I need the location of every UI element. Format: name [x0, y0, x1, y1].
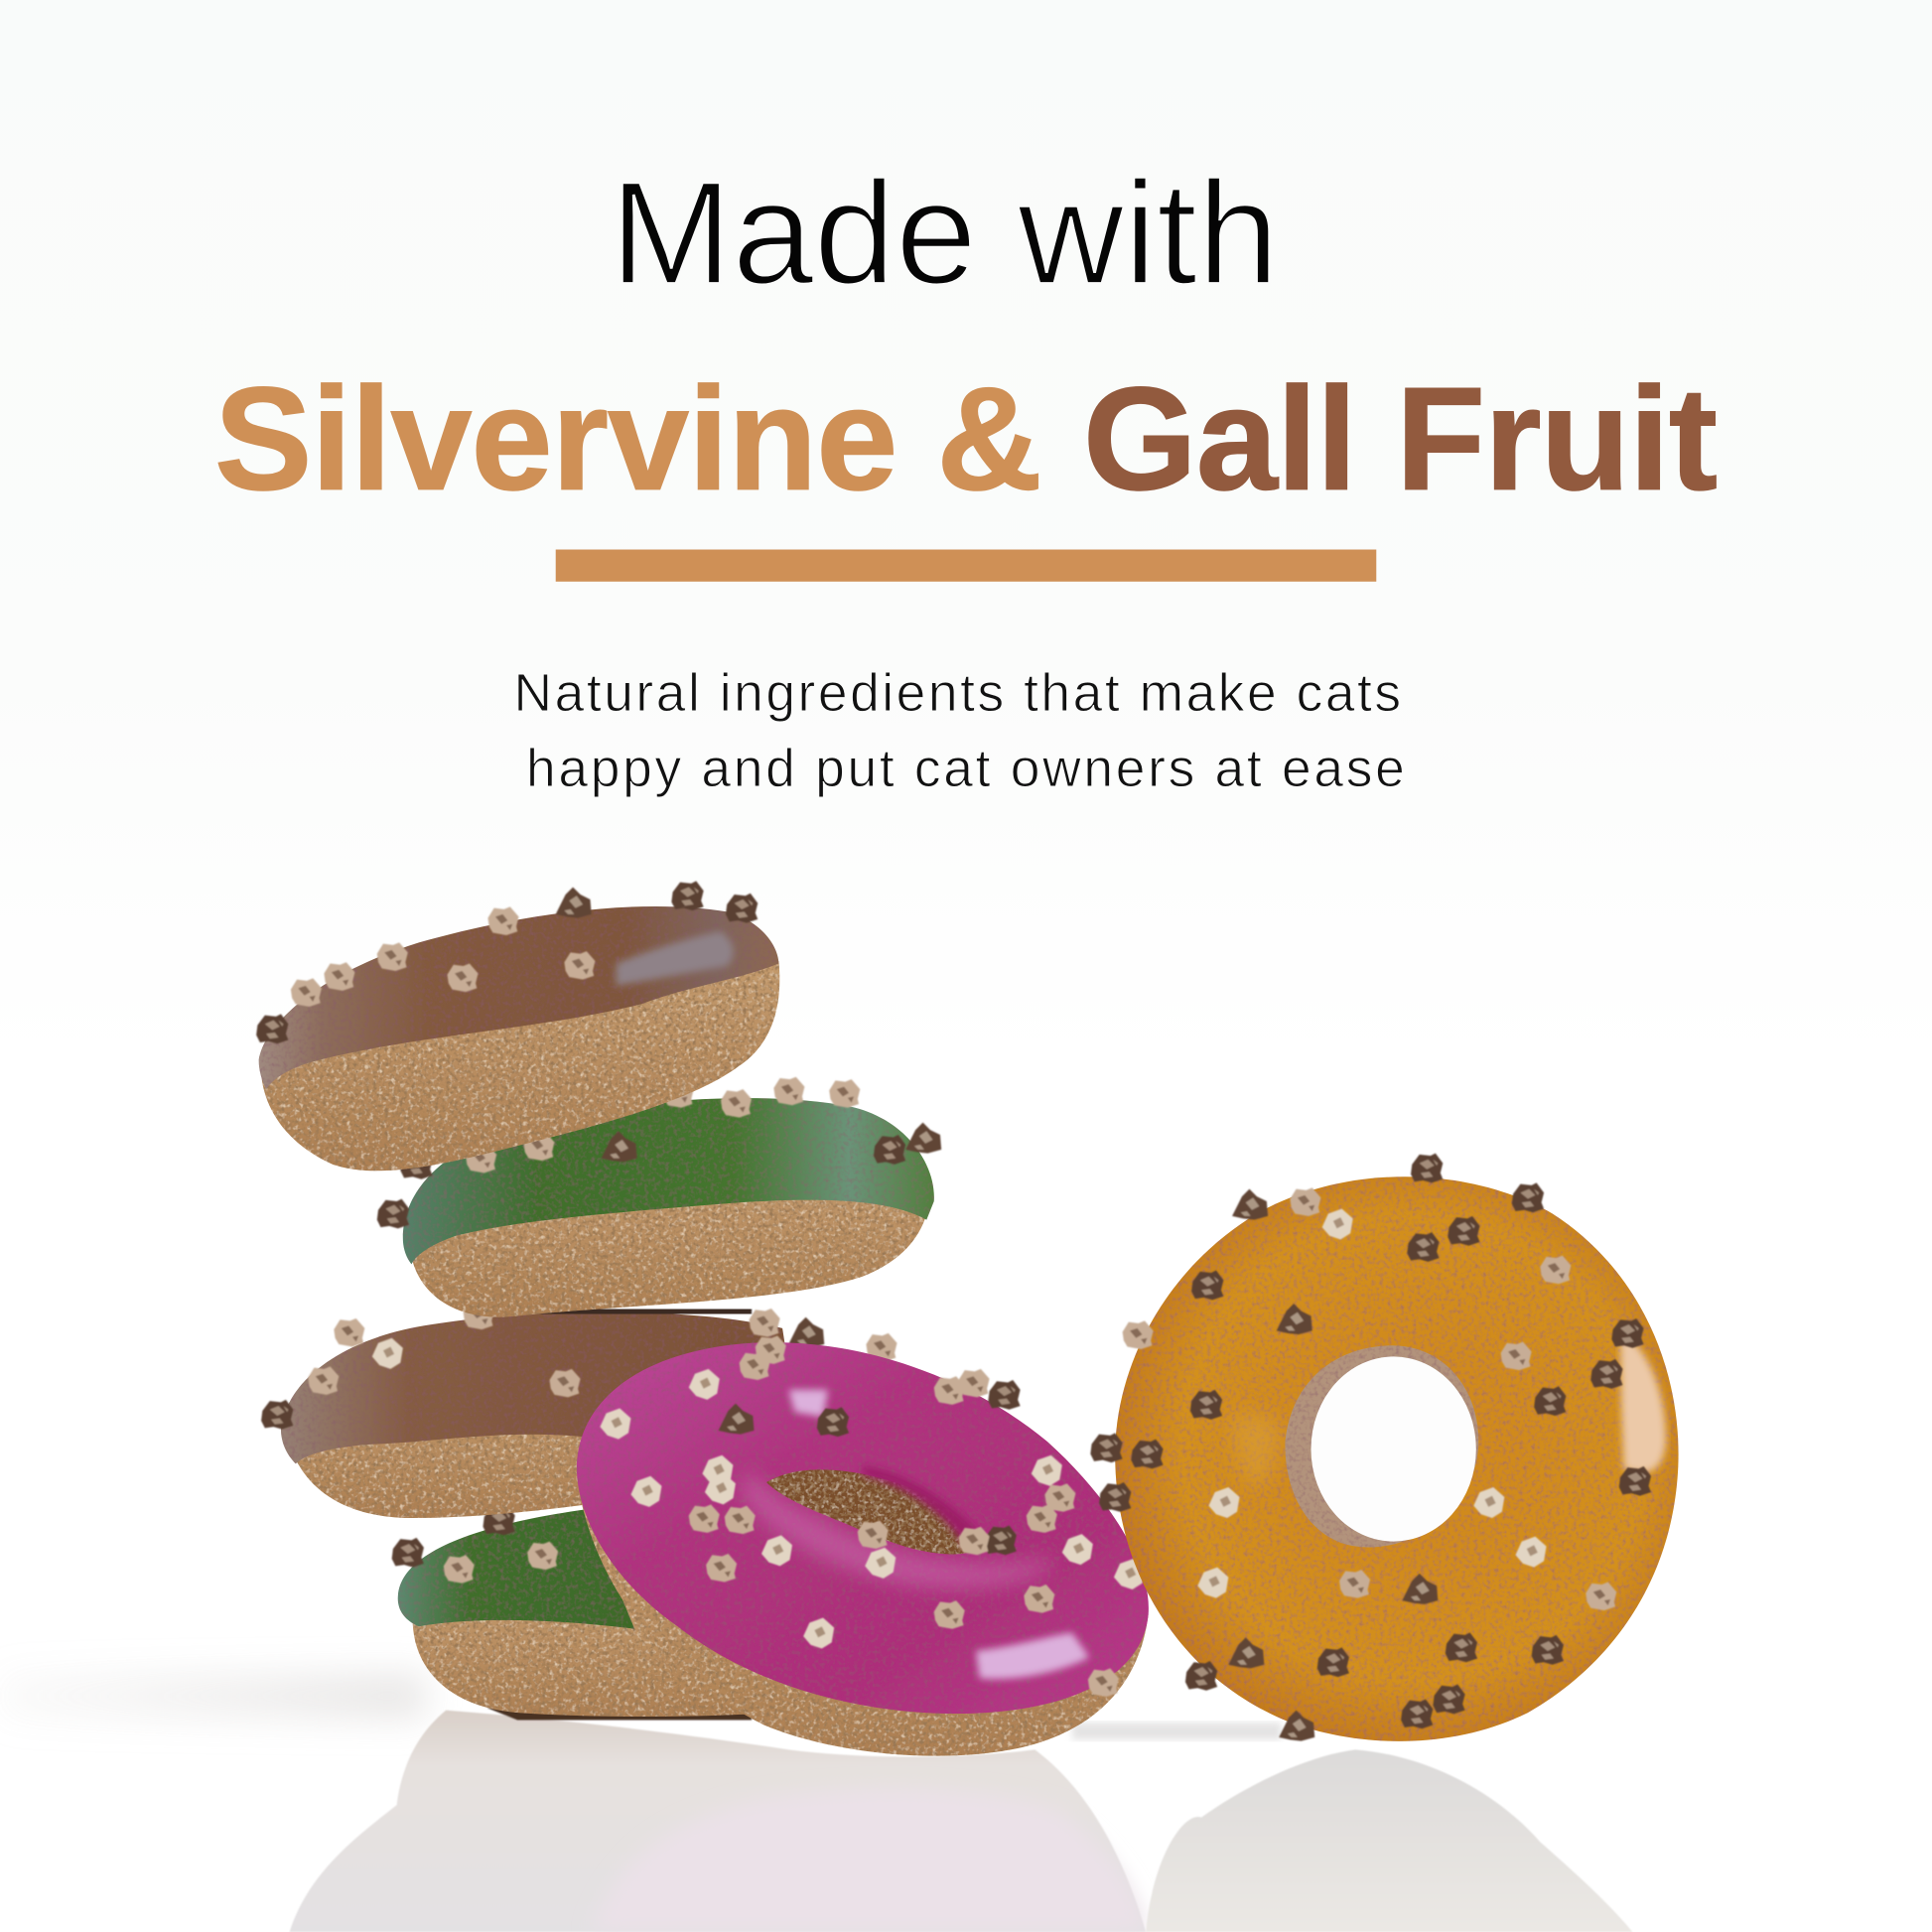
inner hole: [766, 1469, 970, 1555]
floor shadow and reflections: [0, 1673, 1632, 1932]
hole upper shade: [863, 1466, 986, 1550]
stack reflection: [290, 1711, 1146, 1932]
icing highlights: [788, 1390, 1089, 1679]
donut stack: top brown: [256, 881, 779, 1171]
biscuit base: [410, 1171, 930, 1317]
side sheen: [1232, 1415, 1282, 1485]
shadow between donuts: [1072, 1723, 1282, 1739]
magenta icing: [577, 1342, 1149, 1714]
chocolate icing: [259, 906, 778, 1089]
pale lip around hole: [740, 1472, 1053, 1588]
green icing: [403, 1098, 934, 1264]
pale highlight: [1620, 1330, 1666, 1472]
donut stack: upper green: [377, 1077, 941, 1317]
subtitle line 1: Natural ingredients that make cats: [514, 664, 1401, 723]
title: Made with: Made with: [610, 151, 1279, 315]
chocolate icing: [281, 1312, 788, 1463]
icing highlight: [617, 931, 734, 986]
orange donut reflection: [1146, 1749, 1632, 1932]
donut stack: bottom green: [392, 1506, 752, 1721]
heading part: Gall Fruit: Gall Fruit: [1083, 357, 1718, 521]
biscuit base: [413, 1589, 752, 1717]
heading part: Silvervine &: Silvervine &: [214, 357, 1042, 521]
orange body: [1115, 1176, 1679, 1741]
inner biscuit wall: [1285, 1345, 1478, 1547]
left floor shadow: [0, 1673, 425, 1719]
magenta reflection: [592, 1789, 1149, 1932]
hole: [1311, 1356, 1476, 1542]
orange donut: [1090, 1154, 1679, 1741]
subtitle line 2: happy and put cat owners at ease: [526, 740, 1405, 798]
heading: Silvervine & Gall Fruit: [214, 357, 1718, 521]
sprinkles: [392, 1506, 558, 1584]
sprinkles: [600, 1335, 1145, 1697]
sprinkles: [377, 1077, 941, 1228]
subtitle text: [514, 664, 1405, 798]
dark gap shadow: [511, 1310, 752, 1313]
green icing: [398, 1509, 634, 1629]
underline bar: [556, 550, 1376, 582]
biscuit base: [288, 1380, 653, 1518]
biscuit base: [579, 1491, 1149, 1756]
base shadow: [486, 1708, 752, 1721]
sprinkles: [1090, 1154, 1651, 1741]
biscuit base: [261, 961, 779, 1171]
sprinkles: [261, 1302, 897, 1430]
magenta donut: [577, 1335, 1149, 1756]
sprinkles: [256, 881, 758, 1043]
donut stack: lower brown: [261, 1302, 897, 1518]
